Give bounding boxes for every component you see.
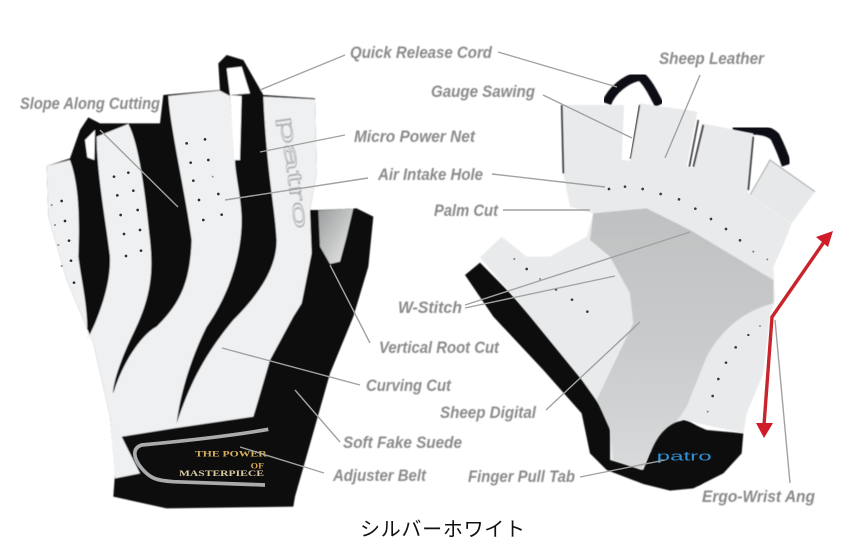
belt slogan — [179, 449, 268, 478]
perforated mesh panel — [590, 208, 773, 470]
wrist black edge — [465, 263, 743, 491]
feature labels: Finger Pull Tab — [468, 468, 575, 486]
feature labels: Palm Cut — [434, 202, 499, 220]
feature labels — [20, 44, 815, 506]
feature labels: Quick Release Cord — [350, 44, 493, 62]
pull tab — [645, 421, 722, 488]
back-of-hand glove — [47, 55, 373, 508]
belt slogan: OF — [251, 461, 264, 470]
thumb inner — [318, 208, 353, 264]
tab logo: patro — [657, 449, 712, 464]
glove black base — [47, 55, 373, 508]
palm-side glove — [465, 76, 815, 491]
feature labels: Gauge Sawing — [431, 83, 535, 101]
feature labels: Air Intake Hole — [377, 166, 483, 184]
little finger edge — [750, 160, 815, 195]
feature labels: Sheep Digital — [440, 404, 536, 422]
palm leather — [480, 103, 792, 470]
top strap — [607, 76, 659, 105]
ring finger loop opening — [85, 130, 95, 160]
finger slit — [623, 105, 639, 159]
adjuster belt silver trim — [135, 429, 268, 485]
feature labels: W-Stitch — [398, 299, 462, 317]
palm holes — [513, 185, 768, 413]
feature labels: Ergo-Wrist Ang — [702, 488, 815, 506]
cord loop opening — [227, 67, 250, 95]
finger slit — [230, 95, 242, 160]
back glove details — [51, 115, 313, 485]
feature labels: Adjuster Belt — [332, 467, 427, 485]
white leather panels — [47, 91, 317, 478]
feature labels: Sheep Leather — [659, 50, 765, 68]
feature labels: Vertical Root Cut — [379, 339, 500, 357]
feature labels: Slope Along Cutting — [20, 95, 160, 113]
little finger — [750, 160, 815, 223]
index finger logo: patro — [274, 115, 313, 230]
feature labels: Micro Power Net — [354, 128, 476, 146]
leader lines — [100, 52, 790, 483]
little finger strap — [733, 130, 787, 165]
caption: シルバーホワイト — [360, 519, 525, 541]
belt slogan: THE POWER — [195, 449, 268, 458]
belt slogan: MASTERPIECE — [179, 469, 265, 478]
feature labels: Curving Cut — [366, 377, 452, 395]
ventilation holes — [51, 138, 223, 284]
feature labels: Soft Fake Suede — [343, 434, 462, 452]
ergo-wrist angle red arrow — [756, 231, 833, 438]
finger shadows — [562, 105, 753, 190]
